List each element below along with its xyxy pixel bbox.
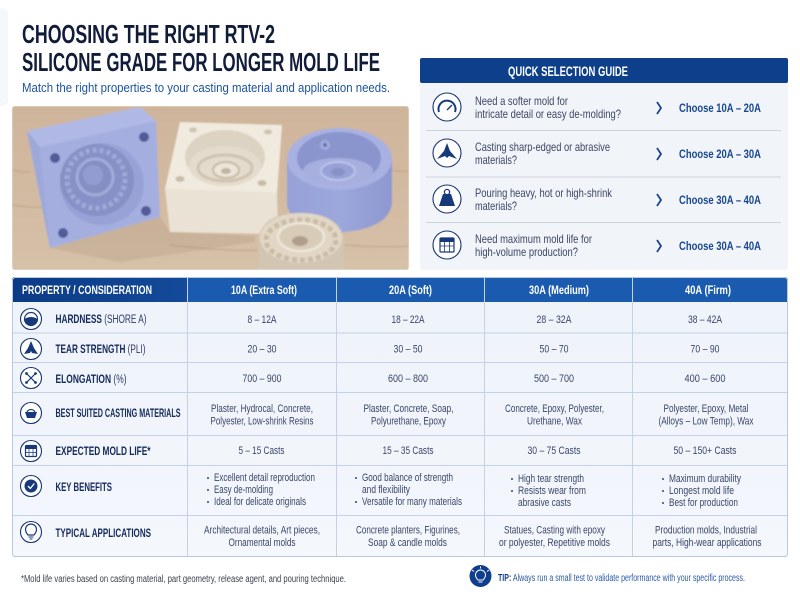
row: key benefits: and flexibility xyxy=(362,484,410,496)
row: typical applications: Production molds, Industrial xyxy=(655,524,757,536)
title: SILICONE GRADE FOR LONGER MOLD LIFE xyxy=(22,47,380,77)
guide row: heavy materials: Pouring heavy, hot or high-shrink xyxy=(475,186,613,200)
icon: calendar xyxy=(433,231,461,259)
guide row: heavy materials: materials? xyxy=(475,199,517,213)
row: tear strength: 70 – 90 xyxy=(690,344,720,356)
icon: elongation arrows xyxy=(20,368,42,388)
cast ornament xyxy=(258,213,344,270)
row: typical applications: TYPICAL APPLICATIONS xyxy=(56,528,151,540)
row: elongation: ELONGATION (%) xyxy=(56,374,127,386)
white square mold xyxy=(165,122,282,234)
icon: pouring bucket xyxy=(20,402,42,424)
row: hardness: HARDNESS (SHORE A) xyxy=(56,314,147,326)
icon: weight xyxy=(433,185,461,213)
row: elongation: 700 – 900 xyxy=(242,373,282,385)
title xyxy=(22,19,380,77)
icon: tip light bulb xyxy=(470,565,492,587)
guide row: softer mold xyxy=(433,93,761,121)
row: expected mold life: 15 – 35 Casts xyxy=(382,445,434,457)
blue square mold xyxy=(27,107,160,248)
row: typical applications: parts, High-wear applications xyxy=(652,537,762,549)
guide row: abrasive materials: materials? xyxy=(475,153,517,167)
row: hardness: 8 – 12A xyxy=(248,314,277,326)
row: expected mold life: EXPECTED MOLD LIFE* xyxy=(56,446,151,458)
guide row: softer mold: Choose 10A – 20A xyxy=(679,101,761,115)
row: hardness: 28 – 32A xyxy=(536,314,572,326)
photo: silicone molds on a wooden table xyxy=(12,106,409,270)
icon: tear star xyxy=(433,139,461,167)
subtitle: Match the right properties to your casting material and application needs. xyxy=(22,81,390,95)
row: tear strength: 20 – 30 xyxy=(248,344,276,356)
row: tear strength: 50 – 70 xyxy=(540,344,568,356)
row: elongation: 600 – 800 xyxy=(388,373,428,385)
row: tear strength: 30 – 50 xyxy=(394,344,422,356)
row: best suited casting materials: Polyester, Epoxy, Metal xyxy=(664,403,748,415)
row: key benefits: Easy de-molding xyxy=(214,484,273,496)
icon: tear strength xyxy=(20,338,42,360)
row: best suited casting materials xyxy=(20,402,754,428)
table header: 40A (Firm) xyxy=(685,285,731,297)
icon: hardness xyxy=(20,308,42,330)
row: key benefits: Excellent detail reproduction xyxy=(214,472,315,484)
row: tear strength xyxy=(20,338,720,360)
row: best suited casting materials: Urethane, Wax xyxy=(527,416,582,428)
row: expected mold life: 30 – 75 Casts xyxy=(528,445,581,457)
row: best suited casting materials: Concrete, Epoxy, Polyester, xyxy=(505,403,604,415)
row: key benefits: High tear strength xyxy=(518,473,584,485)
row: key benefits: Ideal for delicate originals xyxy=(214,496,306,508)
table header: PROPERTY / CONSIDERATION xyxy=(22,285,152,297)
row: typical applications: Concrete planters, Figurines, xyxy=(356,524,460,536)
table header: 30A (Medium) xyxy=(529,285,589,297)
row: best suited casting materials: BEST SUITED CASTING MATERIALS xyxy=(56,408,181,420)
row: typical applications: Architectural details, Art pieces, xyxy=(204,524,320,536)
row: elongation: 400 – 600 xyxy=(684,373,726,385)
row: key benefits: Resists wear from xyxy=(518,485,586,497)
guide row: abrasive materials: Casting sharp-edged or abrasive xyxy=(475,140,610,154)
row: hardness xyxy=(20,308,723,330)
row: expected mold life xyxy=(20,440,737,462)
row: key benefits: Maximum durability xyxy=(669,473,741,485)
row: typical applications: Statues, Casting with epoxy xyxy=(504,524,605,536)
row: best suited casting materials: (Alloys – Low Temp), Wax xyxy=(658,416,754,428)
row: elongation: 500 – 700 xyxy=(534,373,574,385)
row: best suited casting materials: Polyurethane, Epoxy xyxy=(371,416,446,428)
row: elongation xyxy=(20,368,726,388)
guide row: heavy materials xyxy=(433,185,761,213)
row: key benefits: Longest mold life xyxy=(669,485,734,497)
guide row: maximum mold life: Choose 30A – 40A xyxy=(679,239,761,253)
guide row: maximum mold life: Need maximum mold life for xyxy=(475,232,592,246)
guide header: QUICK SELECTION GUIDE xyxy=(508,63,628,79)
row: key benefits: Good balance of strength xyxy=(362,472,453,484)
guide row: maximum mold life: high-volume production? xyxy=(475,245,578,259)
comparison table xyxy=(12,277,788,557)
row: expected mold life: 5 – 15 Casts xyxy=(238,445,285,457)
row: tear strength: TEAR STRENGTH (PLI) xyxy=(56,344,146,356)
tip callout xyxy=(470,565,745,587)
row: expected mold life: 50 – 150+ Casts xyxy=(674,445,737,457)
blue round mold xyxy=(287,128,392,232)
guide row: maximum mold life xyxy=(433,231,761,259)
row: best suited casting materials: Plaster, Hydrocal, Concrete, xyxy=(211,403,313,415)
guide header xyxy=(420,58,788,83)
table header: 10A (Extra Soft) xyxy=(231,285,297,297)
row: key benefits: Versatile for many materials xyxy=(362,496,462,508)
row: key benefits: abrasive casts xyxy=(518,497,571,509)
guide row: abrasive materials: Choose 20A – 30A xyxy=(679,147,761,161)
row: best suited casting materials: Polyester, Low-shrink Resins xyxy=(210,416,314,428)
icon: check badge xyxy=(20,476,42,496)
row: typical applications xyxy=(20,522,762,549)
panel: quick selection guide xyxy=(420,58,788,270)
row: typical applications: Soap & candle molds xyxy=(368,537,447,549)
row: hardness: 38 – 42A xyxy=(688,314,723,326)
row: hardness: 18 – 22A xyxy=(392,314,425,326)
table header: 20A (Soft) xyxy=(389,285,432,297)
table header xyxy=(12,277,788,302)
guide row: abrasive materials xyxy=(433,139,761,167)
icon: calendar xyxy=(20,440,42,462)
guide row: softer mold: intricate detail or easy de-molding? xyxy=(475,107,621,121)
icon: gauge xyxy=(433,93,461,121)
row: key benefits: Best for production xyxy=(669,497,738,509)
row: key benefits: KEY BENEFITS xyxy=(56,482,112,494)
guide row: heavy materials: Choose 30A – 40A xyxy=(679,193,761,207)
title: CHOOSING THE RIGHT RTV-2 xyxy=(22,19,275,49)
row: typical applications: Ornamental molds xyxy=(228,537,296,549)
guide row: softer mold: Need a softer mold for xyxy=(475,94,568,108)
footnote: *Mold life varies based on casting material, part geometry, release agent, and pouring technique. xyxy=(21,574,346,585)
icon: light bulb xyxy=(20,522,42,542)
row: best suited casting materials: Plaster, Concrete, Soap, xyxy=(364,403,454,415)
row: typical applications: or polyester, Repetitive molds xyxy=(499,537,610,549)
row: key benefits xyxy=(20,472,741,509)
